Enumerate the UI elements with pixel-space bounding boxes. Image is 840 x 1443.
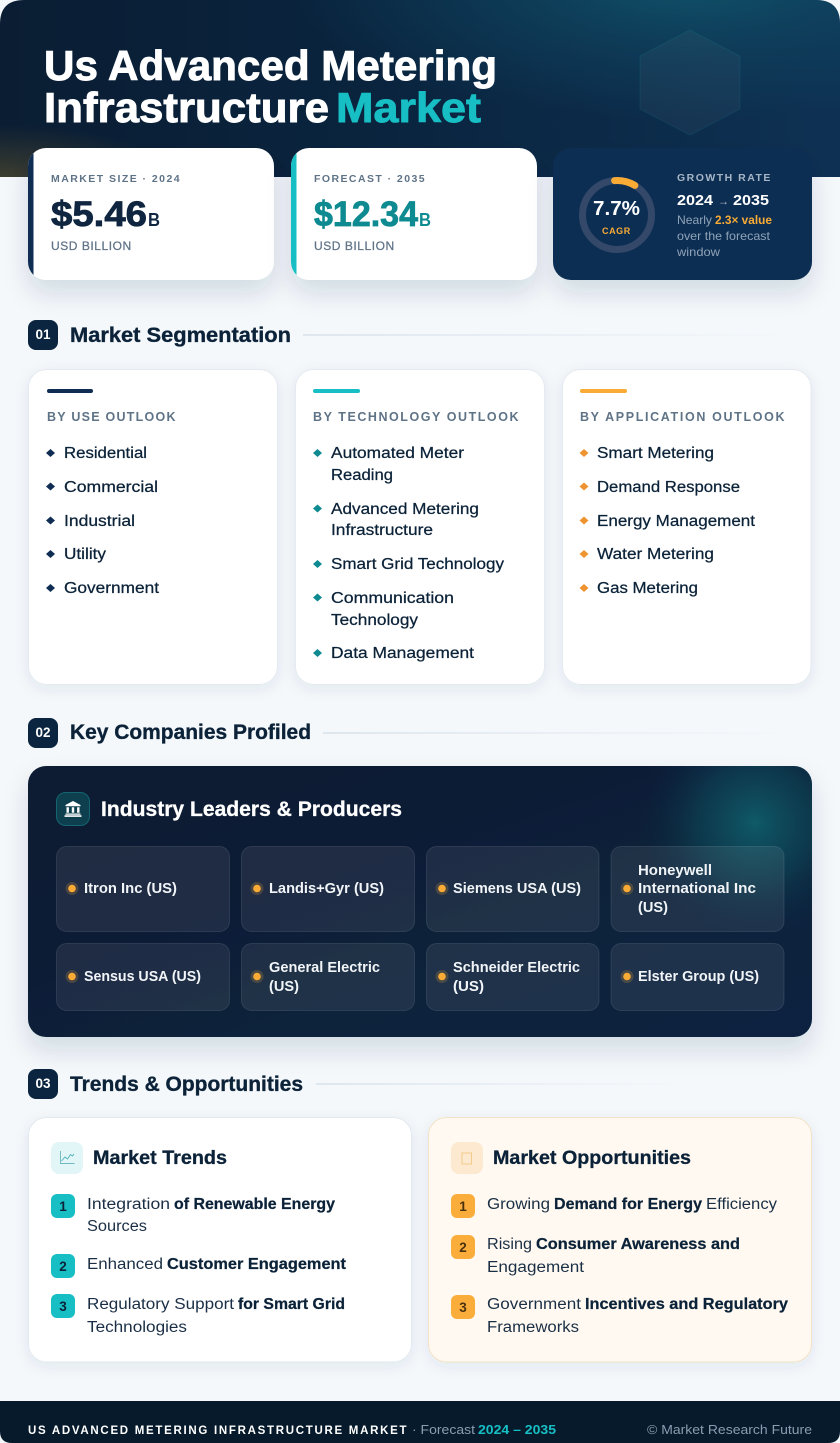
company: sensus <box>56 944 230 1010</box>
title: Market <box>336 84 481 131</box>
stat card: market size 2024: USD BILLION <box>51 239 132 253</box>
footer: · Forecast <box>412 1423 476 1437</box>
panel: by technology outlook: Reading <box>331 467 393 484</box>
company: elster <box>611 944 784 1010</box>
stat card: growth rate: 2024 <box>677 192 714 209</box>
trend 3: Regulatory Support <box>87 1296 235 1313</box>
opportunity 2 <box>451 1235 740 1276</box>
opportunity 1: Efficiency <box>706 1196 777 1213</box>
stat card: forecast 2035: $12.34 <box>314 195 419 234</box>
trend 3: Technologies <box>87 1319 187 1336</box>
panel: by technology outlook <box>296 370 544 684</box>
opportunity 2: Consumer Awareness and <box>536 1236 740 1253</box>
stat card: market size 2024: B <box>148 210 160 230</box>
company: elster: Elster Group (US) <box>638 969 759 985</box>
stat card: growth rate: over the forecast <box>677 229 771 243</box>
stat card: growth rate: Nearly <box>677 213 712 227</box>
stat card: growth rate: window <box>676 245 720 259</box>
panel: by technology outlook: BY TECHNOLOGY OUTLOOK <box>313 410 520 424</box>
company: landis+gyr: Landis+Gyr (US) <box>269 881 384 897</box>
trend 2: Customer Engagement <box>167 1256 346 1273</box>
section heading: market segmentation <box>28 320 800 350</box>
section heading: trends and opportunities: Trends & Opportunities <box>70 1073 303 1096</box>
company: honeywell: Honeywell <box>638 863 712 879</box>
panel: market trends: Market Trends <box>93 1148 227 1169</box>
footer: US ADVANCED METERING INFRASTRUCTURE MARKET <box>28 1425 408 1437</box>
panel: by application outlook: Demand Response <box>597 479 740 496</box>
section heading: trends and opportunities <box>28 1069 690 1099</box>
footer: 2024 – 2035 <box>478 1423 556 1437</box>
stat card: market size 2024: $5.46 <box>51 195 147 234</box>
stat card: growth rate: 2.3× value <box>715 213 772 227</box>
company: siemens <box>426 846 599 932</box>
trend 1: 1 <box>59 1199 67 1214</box>
panel: market opportunities <box>428 1118 812 1362</box>
section heading: market segmentation: 01 <box>35 327 51 342</box>
panel: by use outlook: Government <box>64 580 160 597</box>
trend 2 <box>51 1254 346 1278</box>
panel: market opportunities: Market Opportunities <box>493 1148 691 1169</box>
trend 1 <box>51 1194 335 1235</box>
panel: by use outlook <box>28 370 278 684</box>
panel: by use outlook: Industrial <box>64 513 135 530</box>
stat card: forecast 2035: FORECAST · 2035 <box>314 173 426 185</box>
company: honeywell <box>611 846 784 932</box>
icon: line chart <box>51 1142 83 1174</box>
trend 3: 3 <box>59 1299 67 1314</box>
panel: by technology outlook: Data Management <box>331 645 475 662</box>
opportunity 2: Engagement <box>487 1259 585 1276</box>
opportunity 3: Government <box>487 1296 582 1313</box>
trend 3 <box>51 1294 345 1336</box>
company: general electric <box>242 944 414 1010</box>
stat card: forecast 2035: B <box>419 210 431 230</box>
CAGR ring <box>582 180 652 250</box>
section heading: market segmentation: Market Segmentation <box>70 324 291 347</box>
panel: by use outlook: BY USE OUTLOOK <box>47 410 177 424</box>
stat card: growth rate: GROWTH RATE <box>677 172 772 184</box>
panel: by application outlook: Smart Metering <box>597 445 714 462</box>
opportunity 3 <box>451 1295 788 1336</box>
CAGR ring: CAGR <box>602 226 632 236</box>
panel: by technology outlook: Smart Grid Technology <box>331 556 504 573</box>
opportunity 2: Rising <box>487 1236 532 1253</box>
panel: by use outlook: Utility <box>64 546 106 563</box>
panel: by technology outlook: Automated Meter <box>331 445 464 462</box>
panel: by technology outlook: Communication <box>331 590 454 607</box>
panel: by use outlook: Residential <box>64 445 147 462</box>
opportunity 1 <box>451 1194 777 1218</box>
stat card: forecast 2035 <box>291 148 537 280</box>
footer <box>0 1401 840 1443</box>
icon: missing glyph box <box>451 1142 483 1174</box>
trend 1: Integration <box>87 1196 170 1213</box>
stat card: market size 2024: MARKET SIZE · 2024 <box>51 173 181 185</box>
panel: by use outlook: Commercial <box>64 479 158 496</box>
header band <box>0 0 840 177</box>
panel: by application outlook: Energy Management <box>597 513 756 530</box>
stat card: growth rate: 2035 <box>733 192 769 209</box>
panel: by technology outlook: Advanced Metering <box>331 501 479 518</box>
company: schneider electric <box>426 944 599 1010</box>
company: sensus: Sensus USA (US) <box>84 969 201 985</box>
section heading: key companies: Key Companies Profiled <box>70 721 311 744</box>
opportunity 3: 3 <box>459 1300 467 1315</box>
company: schneider electric: (US) <box>453 979 484 995</box>
company: siemens: Siemens USA (US) <box>453 881 581 897</box>
trend 1: Sources <box>87 1218 147 1235</box>
opportunity 2: 2 <box>459 1240 467 1255</box>
company: honeywell: (US) <box>638 900 668 916</box>
panel: by application outlook <box>562 370 811 684</box>
trend 2: 2 <box>59 1259 67 1274</box>
trend 3: for Smart Grid <box>238 1296 345 1313</box>
company: itron: Itron Inc (US) <box>84 881 177 897</box>
stat card: market size 2024 <box>28 148 274 280</box>
company: honeywell: International Inc <box>638 881 756 897</box>
company: itron <box>56 846 230 932</box>
section heading: key companies: 02 <box>35 725 51 740</box>
stat card: growth rate <box>553 148 812 280</box>
title: Infrastructure <box>44 84 329 131</box>
icon: building <box>56 792 90 826</box>
company: general electric: (US) <box>269 979 299 995</box>
panel: by technology outlook: Infrastructure <box>331 522 433 539</box>
title <box>44 42 497 131</box>
title: Us Advanced Metering <box>44 42 497 89</box>
opportunity 1: Growing <box>487 1196 550 1213</box>
section heading: key companies <box>28 718 800 748</box>
stat card: forecast 2035: USD BILLION <box>314 239 395 253</box>
footer: © Market Research Future <box>647 1423 812 1437</box>
opportunity 3: Frameworks <box>487 1319 579 1336</box>
trend 1: of Renewable Energy <box>174 1196 335 1213</box>
section heading: trends and opportunities: 03 <box>35 1076 51 1091</box>
panel: by application outlook: BY APPLICATION OUTLOOK <box>580 410 786 424</box>
panel: by application outlook: Gas Metering <box>597 580 698 597</box>
stat card: growth rate: → <box>718 194 729 208</box>
trend 2: Enhanced <box>87 1256 163 1273</box>
panel: by application outlook: Water Metering <box>597 546 714 563</box>
opportunity 1: 1 <box>459 1199 467 1214</box>
company: landis+gyr <box>242 846 414 932</box>
opportunity 1: Demand for Energy <box>554 1196 702 1213</box>
company: general electric: General Electric <box>269 960 380 976</box>
panel: industry leaders: Industry Leaders & Producers <box>101 798 402 821</box>
panel: by technology outlook: Technology <box>331 612 418 629</box>
panel: market trends <box>28 1118 412 1362</box>
panel: industry leaders <box>28 766 812 1037</box>
opportunity 3: Incentives and Regulatory <box>585 1296 788 1313</box>
CAGR ring: 7.7% <box>593 198 640 220</box>
company: schneider electric: Schneider Electric <box>453 960 580 976</box>
